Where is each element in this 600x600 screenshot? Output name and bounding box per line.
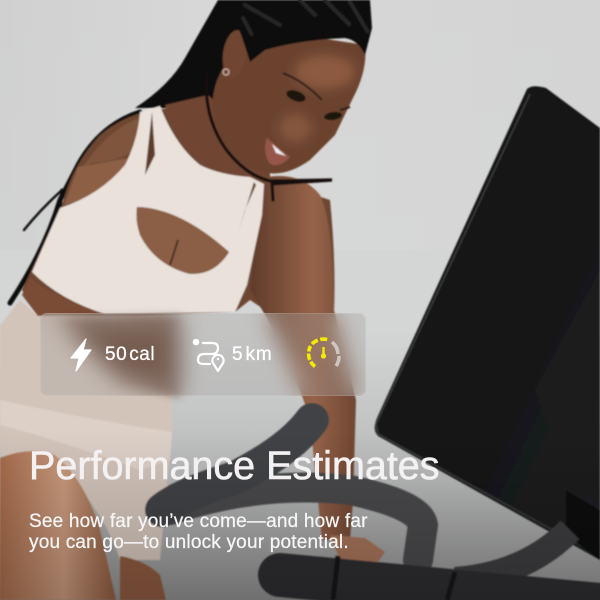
- waist shadow behind panel: [60, 318, 180, 395]
- icon: lightning bolt: [71, 339, 91, 371]
- far arm and torso skin: [22, 100, 334, 320]
- right thigh: [120, 556, 166, 600]
- icon: gauge: [309, 339, 339, 366]
- braid behind shoulder: [10, 112, 140, 303]
- back hair: [135, 0, 250, 108]
- face highlights: [279, 55, 355, 142]
- monitor: [375, 86, 600, 560]
- lower tint: [0, 430, 600, 600]
- neck: [165, 95, 270, 180]
- glass stats panel: [40, 313, 366, 396]
- icon: route with pin: [193, 339, 224, 371]
- distance value: 5km: [232, 344, 273, 365]
- handlebar bands: [333, 556, 455, 600]
- head: [213, 35, 365, 174]
- front braid: [206, 75, 332, 200]
- calories value: 50cal: [105, 344, 155, 365]
- midriff skin: [22, 278, 100, 318]
- hand: [330, 535, 385, 562]
- subtitle: you can go—to unlock your potential.: [29, 532, 349, 553]
- ear: [220, 29, 250, 79]
- monitor mount: [535, 270, 600, 500]
- sports top: [32, 106, 264, 314]
- title: Performance Estimates: [29, 444, 440, 488]
- near shoulder highlights: [66, 118, 140, 205]
- hair top: [238, 0, 372, 62]
- eyes: [285, 88, 307, 104]
- mouth: [265, 138, 290, 165]
- left thigh: [0, 451, 116, 600]
- subtitle: See how far you’ve come—and how far: [29, 511, 368, 532]
- right arm: [250, 176, 356, 540]
- eyebrows: [283, 73, 350, 110]
- bike stem: [455, 530, 570, 580]
- handlebar: [162, 420, 600, 600]
- chest skin: [136, 207, 229, 274]
- earring: [223, 69, 229, 75]
- shorts: [0, 300, 172, 560]
- subtitle: [28, 511, 368, 553]
